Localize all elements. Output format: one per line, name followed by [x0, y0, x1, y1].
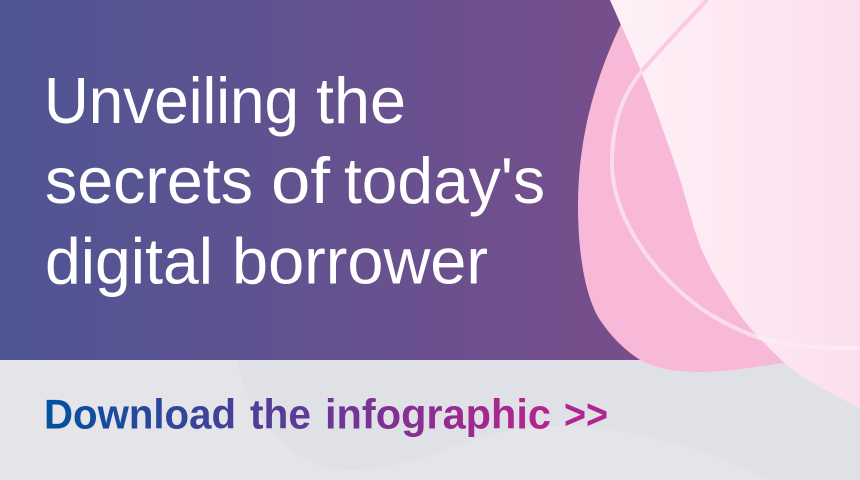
call to action: >>	[564, 390, 608, 438]
title	[44, 64, 545, 298]
title: borrower	[232, 224, 488, 298]
title: today's	[344, 144, 545, 217]
call to action	[44, 390, 608, 438]
title: of	[271, 144, 331, 217]
call to action: Download	[44, 390, 236, 438]
title: secrets	[45, 144, 253, 217]
title: Unveiling	[44, 64, 299, 137]
light pink shape	[610, 0, 860, 408]
purple header background	[0, 0, 860, 360]
curved line	[612, 0, 860, 348]
call to action: infographic	[325, 390, 551, 438]
grey footer band	[0, 360, 860, 480]
pink blob	[578, 24, 800, 372]
title: the	[316, 64, 406, 137]
call to action: the	[250, 390, 311, 438]
title: digital	[45, 224, 213, 298]
